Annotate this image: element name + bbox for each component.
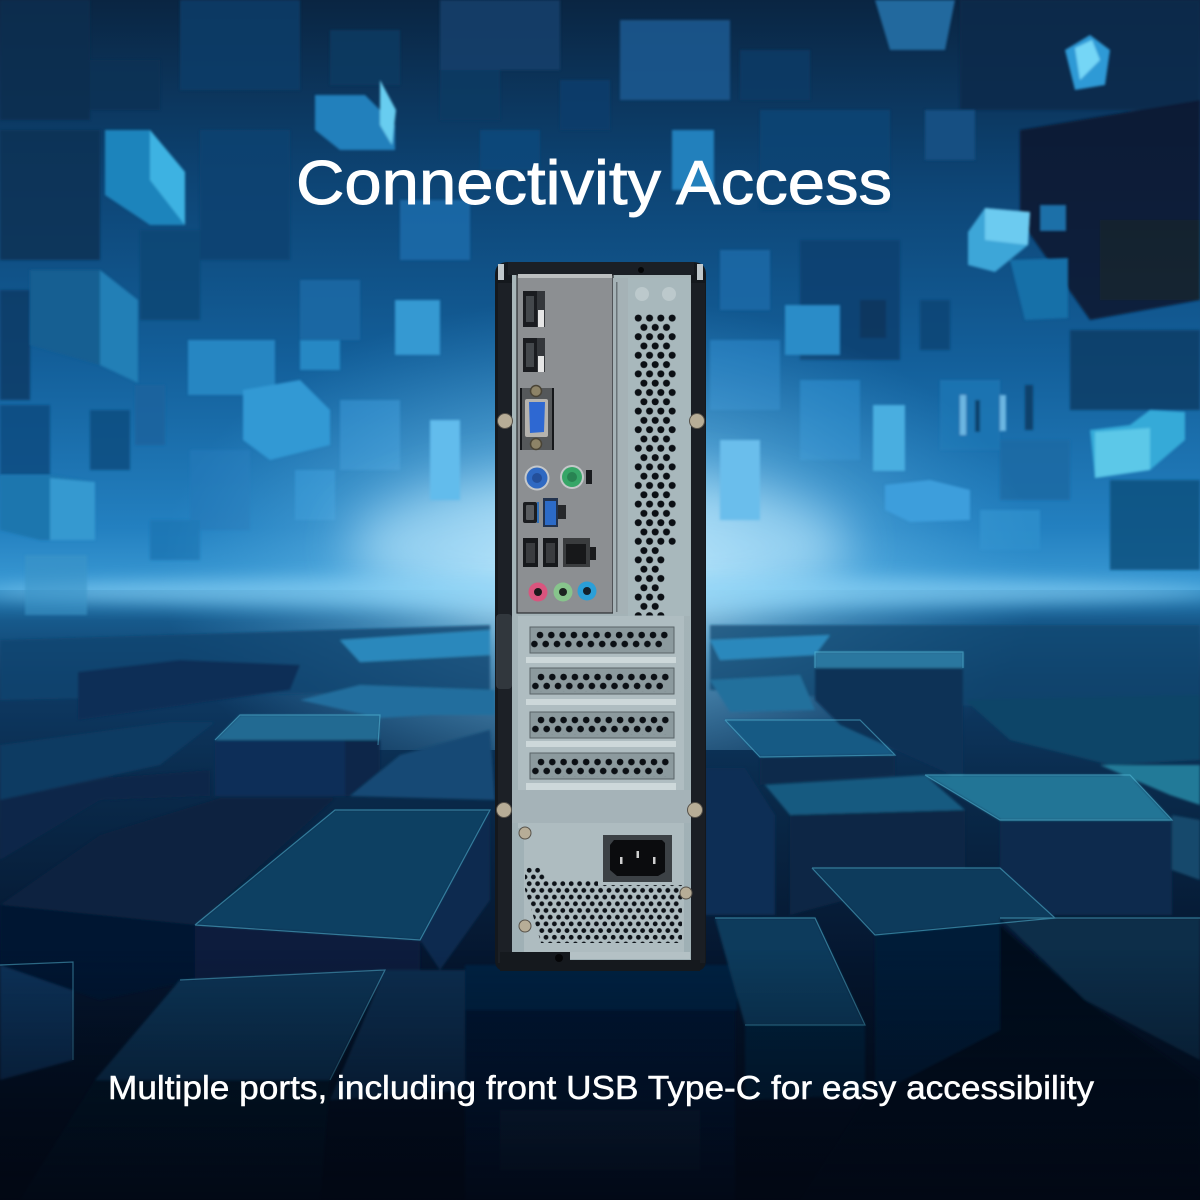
tower chassis — [495, 262, 706, 971]
power supply panel — [512, 790, 691, 952]
background: bright floating cubes — [0, 0, 1185, 615]
port: HDMI 1 — [523, 291, 545, 327]
port: PS/2 mouse — [560, 465, 592, 489]
title: Connectivity Access — [296, 149, 892, 218]
port: USB 3 blue — [543, 498, 566, 527]
PSU vent holes — [525, 867, 682, 943]
expansion slot covers — [496, 614, 684, 828]
I/O shield panel — [517, 274, 628, 614]
background: floor blocks — [0, 625, 1200, 1200]
chassis screws — [496, 414, 704, 932]
background: bottom darkening — [0, 950, 1200, 1200]
port: HDMI 2 — [523, 338, 545, 372]
port: Ethernet RJ45 — [563, 538, 596, 567]
port: audio jacks — [528, 582, 596, 602]
background: block edge highlights — [0, 652, 1200, 1080]
port: PS/2 keyboard — [524, 466, 550, 490]
port: USB pair — [523, 538, 558, 567]
port: HDMI mini — [523, 502, 539, 523]
power inlet socket — [603, 835, 672, 882]
background: glowing horizon — [0, 150, 1200, 750]
product: desktop tower rear view — [495, 262, 706, 971]
background: dark sky tiles — [0, 0, 1200, 570]
rear ventilation grid — [628, 278, 690, 616]
port: VGA — [520, 386, 554, 450]
caption: Multiple ports, including front USB Type-C for easy accessibility — [108, 1069, 1095, 1106]
